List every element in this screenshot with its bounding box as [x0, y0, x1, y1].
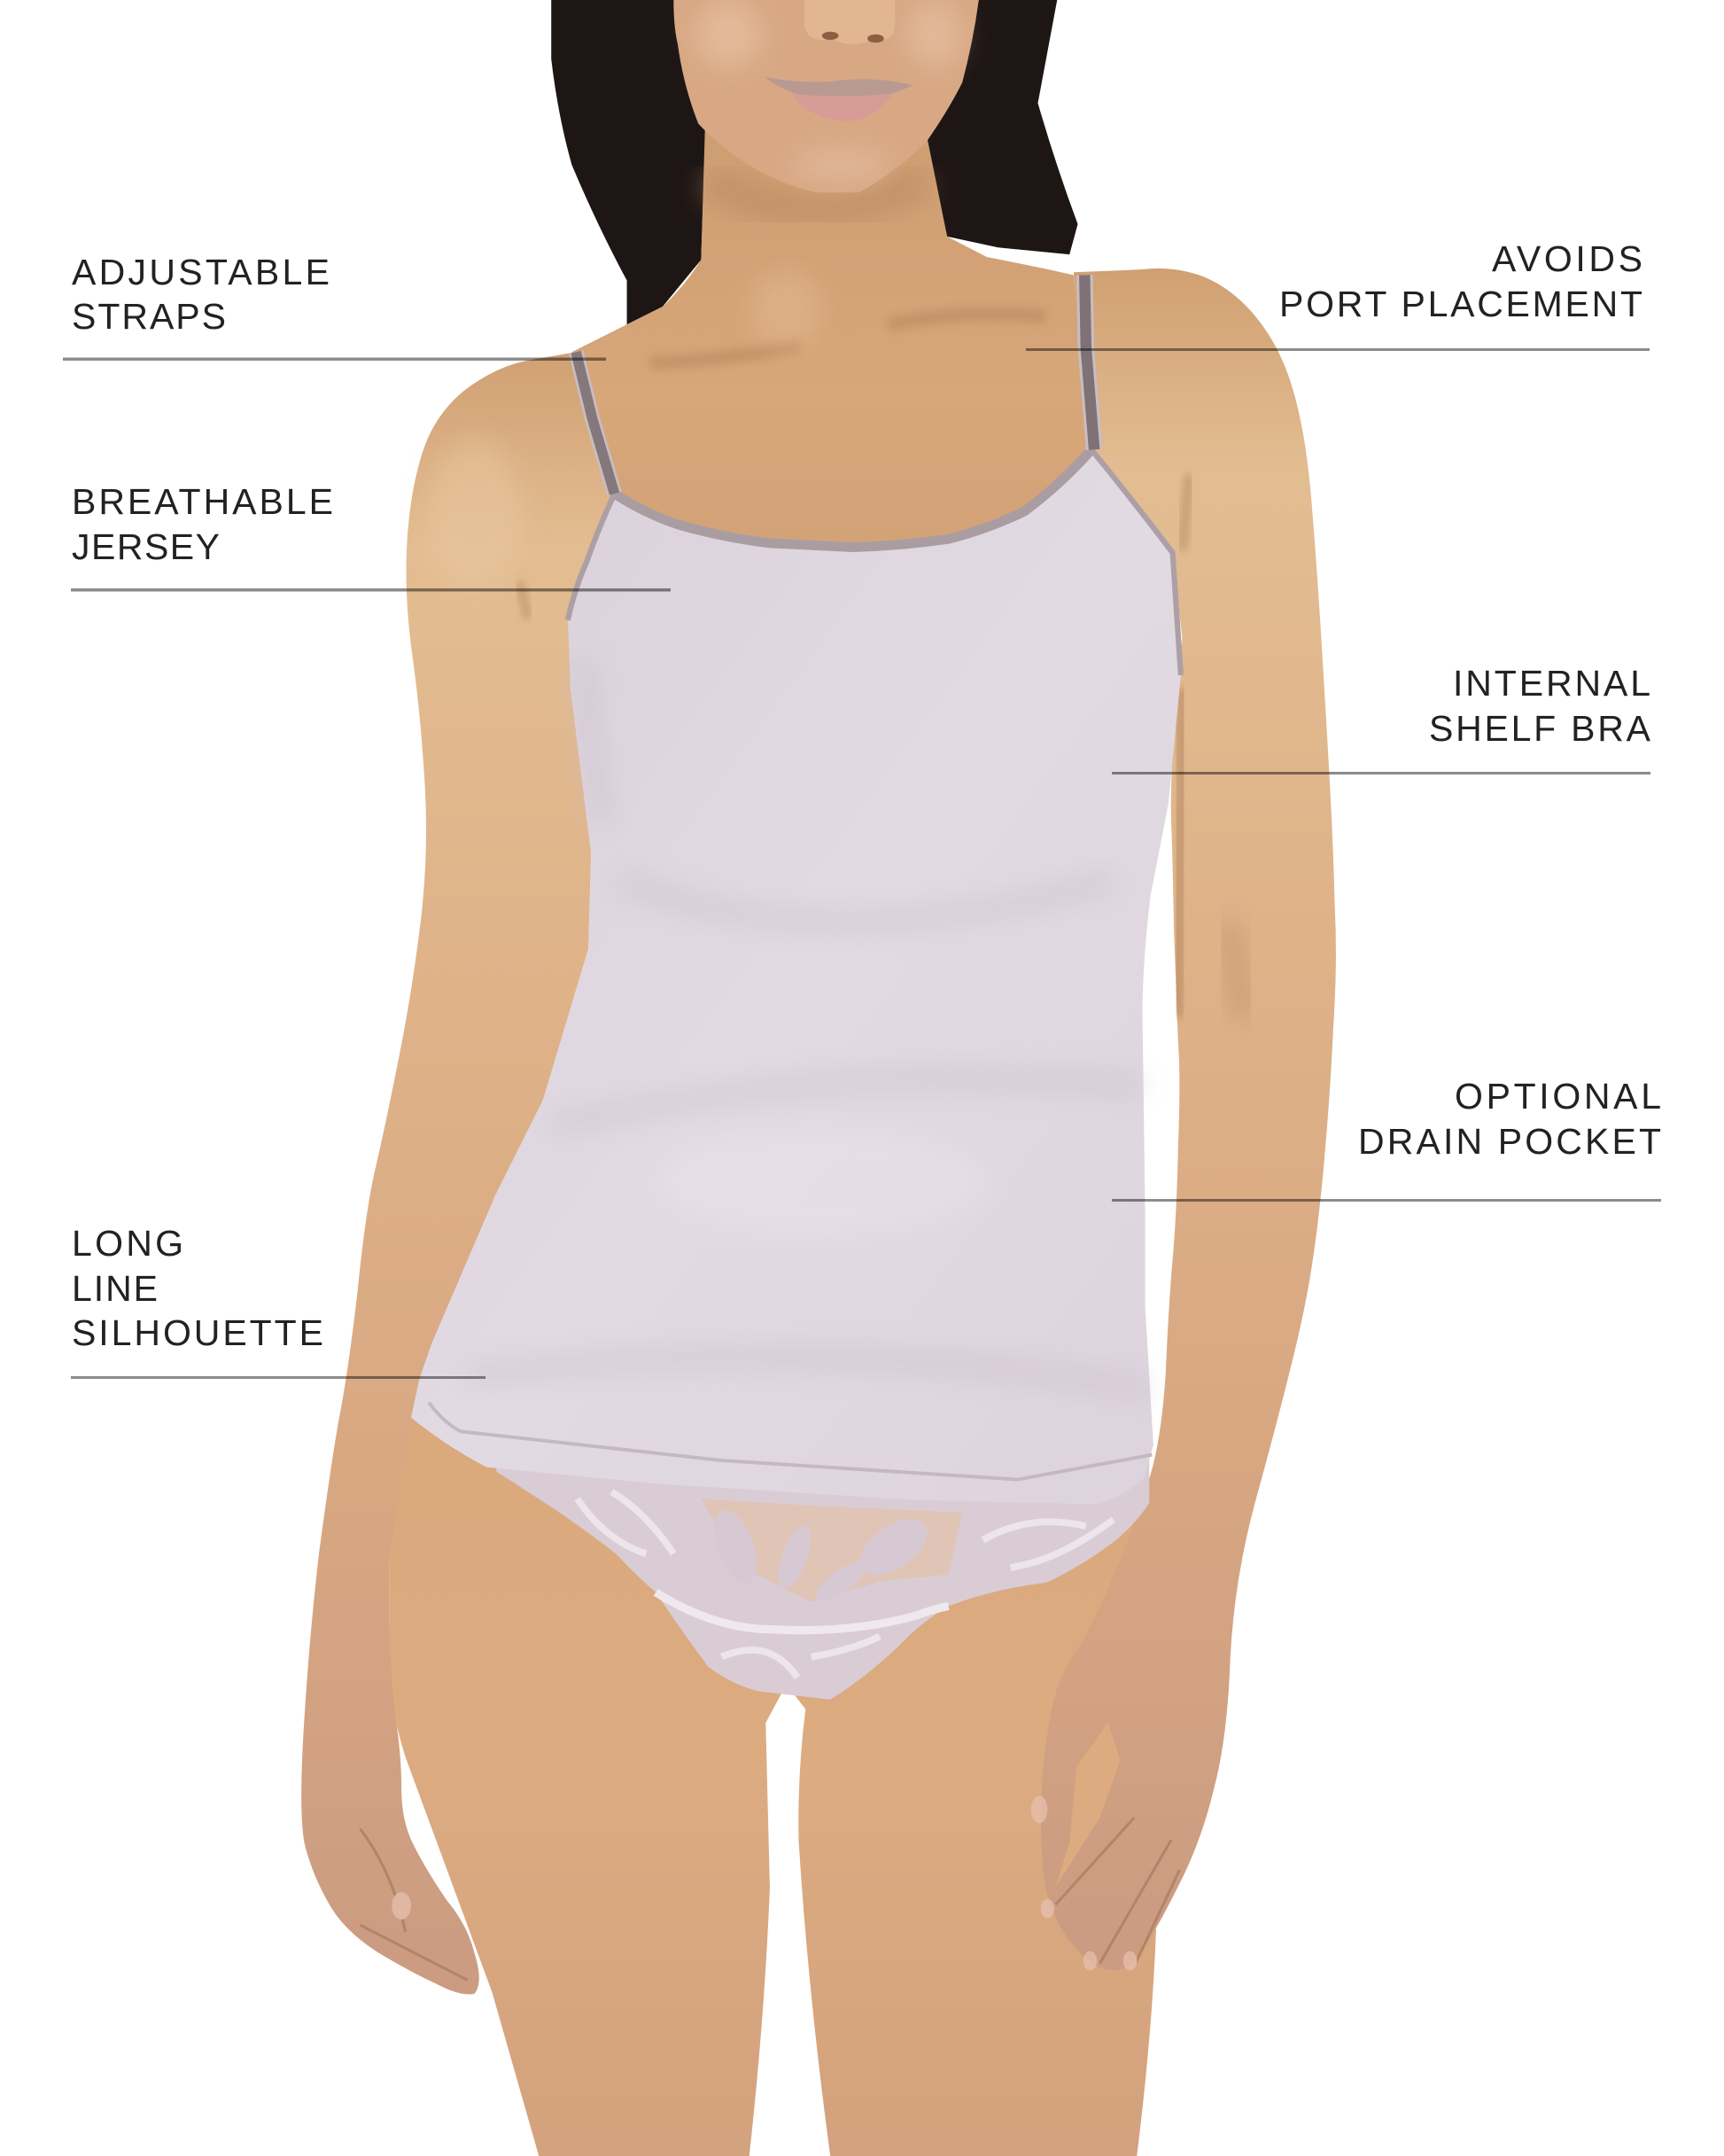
label: optional drain pocket [1112, 1076, 1661, 1202]
label: breathable jersey [71, 481, 671, 592]
left hand fingers [361, 1829, 468, 1980]
label: avoids port placement: PORT PLACEMENT [1279, 284, 1642, 324]
strap left [576, 352, 615, 494]
label: optional drain pocket: OPTIONAL [1455, 1076, 1661, 1117]
strap right core [1084, 275, 1094, 449]
nose [804, 0, 895, 44]
lace sheer panels [701, 1498, 962, 1602]
lace underwear [496, 1458, 1149, 1700]
lips [765, 77, 912, 121]
label: breathable jersey: BREATHABLE [72, 481, 333, 522]
legs [389, 1375, 1156, 2156]
fabric highlight [660, 1127, 990, 1238]
right hand fingers [1031, 1796, 1179, 1971]
label: adjustable straps: STRAPS [72, 296, 226, 337]
side trim [568, 449, 1181, 675]
strap left core [576, 352, 615, 494]
label: internal shelf bra [1112, 663, 1651, 774]
right fingernail one [1041, 1899, 1054, 1919]
label: long line silhouette: SILHOUETTE [72, 1312, 323, 1353]
arm right [1041, 269, 1336, 1971]
label: optional drain pocket: DRAIN POCKET [1358, 1121, 1661, 1162]
hem stitching [429, 1403, 1152, 1480]
inner arm shadow right [1178, 688, 1182, 1017]
label: avoids port placement [1026, 238, 1650, 351]
arm left [301, 352, 615, 1995]
face [673, 0, 979, 192]
lace shape [496, 1458, 1149, 1700]
neck and chest [572, 121, 1099, 578]
label: breathable jersey: JERSEY [72, 526, 220, 567]
camisole [411, 275, 1181, 1505]
sternum highlight [750, 271, 822, 348]
label: adjustable straps [63, 252, 606, 361]
right fingernail two [1083, 1951, 1097, 1971]
collarbone shading [650, 314, 1046, 363]
label: long line silhouette [71, 1223, 485, 1379]
model figure [301, 0, 1336, 2156]
label: internal shelf bra: SHELF BRA [1429, 708, 1651, 749]
camisole body [411, 449, 1181, 1505]
cheek highlights [695, 2, 962, 182]
neckline trim [615, 449, 1091, 548]
lace floral motifs [705, 1505, 937, 1607]
label: long line silhouette: LINE [72, 1268, 158, 1309]
label: adjustable straps: ADJUSTABLE [72, 252, 330, 292]
right hand thigh gap [1056, 1723, 1121, 1887]
strap right [1084, 275, 1094, 449]
label: internal shelf bra: INTERNAL [1453, 663, 1650, 704]
lace scallop edge [656, 1592, 949, 1631]
chin shadow [708, 179, 924, 210]
label: avoids port placement: AVOIDS [1492, 238, 1642, 279]
left fingernail [392, 1892, 411, 1919]
right fingernail three [1123, 1951, 1137, 1971]
armpit crease left [520, 581, 528, 619]
elbow crease right [1228, 922, 1244, 1017]
soft fabric folds [468, 660, 1148, 1389]
right thumbnail [1031, 1796, 1047, 1824]
armpit crease right [1182, 474, 1189, 550]
label: long line silhouette: LONG [72, 1223, 183, 1264]
hair [551, 0, 1078, 324]
lace highlights [578, 1492, 1114, 1677]
shoulder highlight left [426, 440, 523, 591]
